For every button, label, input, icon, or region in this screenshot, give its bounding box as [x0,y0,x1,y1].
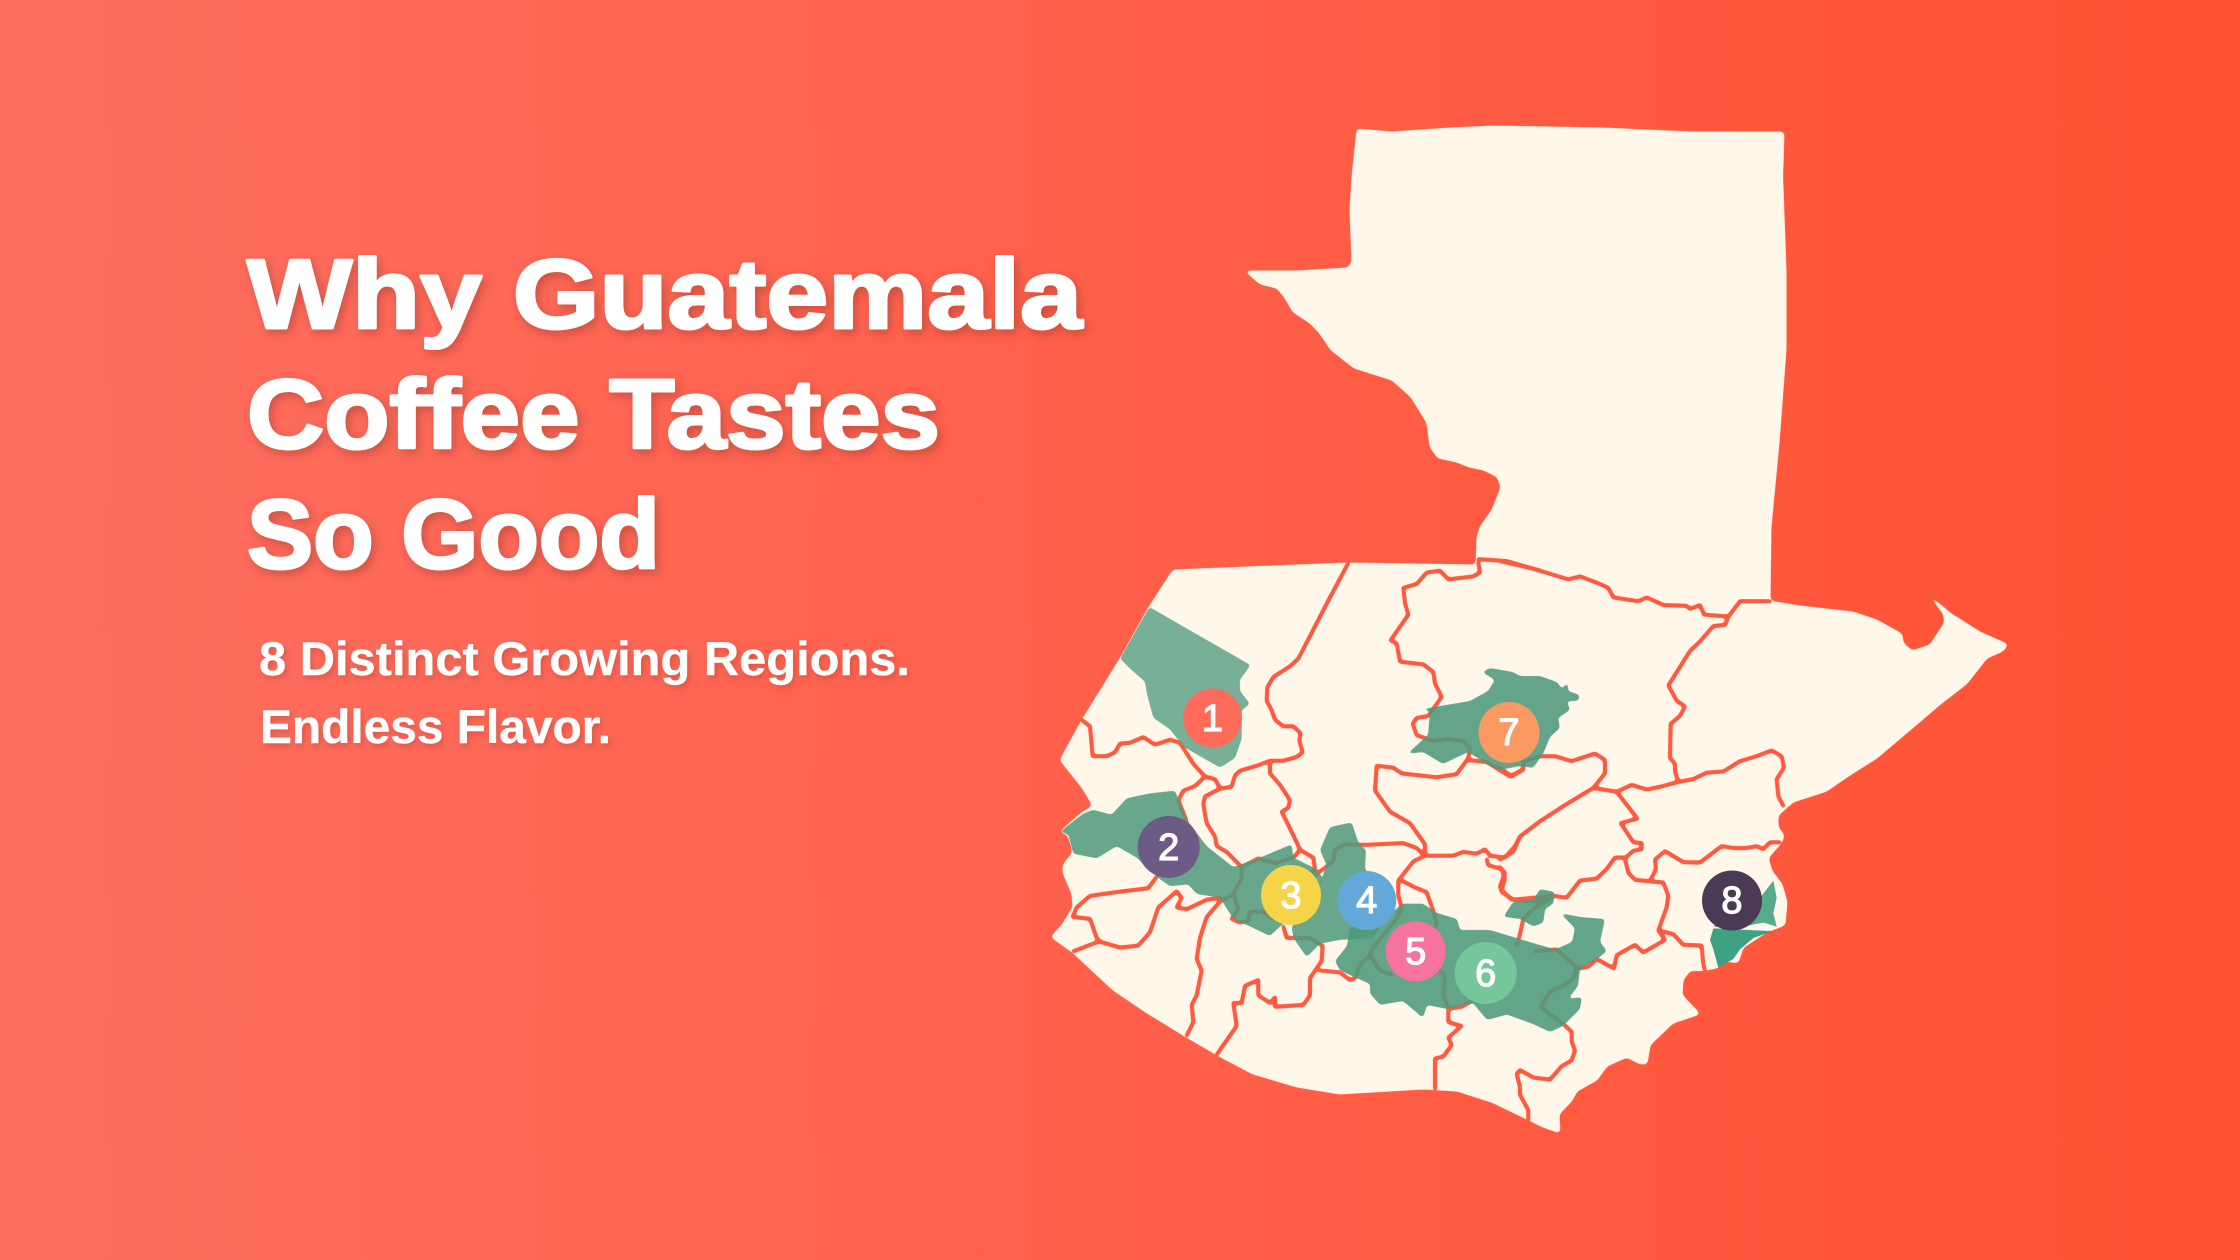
marker 5 [1386,921,1446,981]
marker 4 [1337,871,1396,930]
country landmass [1051,126,2008,1133]
boundaries: west [1073,559,1540,1089]
title [247,239,1084,589]
boundaries: east [1500,561,1784,1122]
marker 3: 3 [1280,875,1302,917]
marker 8 [1702,870,1762,930]
title: So Good [247,479,660,589]
marker 5: 5 [1405,931,1426,973]
marker 7: 7 [1498,712,1520,754]
marker 6: 6 [1475,953,1496,995]
growing region 6 small patch [1503,889,1555,926]
growing region 4 [1292,822,1395,957]
marker 3 [1261,865,1321,925]
department boundaries [1073,559,1784,1122]
growing region 7 [1407,668,1580,770]
title: Coffee Tastes [247,359,940,469]
growing region 8 [1710,881,1777,968]
growing region 2 and 3 [1060,791,1323,936]
marker 1 [1183,688,1242,748]
growing region 1 [1120,607,1251,768]
title: Why Guatemala [247,239,1084,349]
subtitle: Endless Flavor. [260,700,611,753]
map of Guatemala [1051,126,2008,1133]
marker 8: 8 [1721,880,1743,922]
marker 6 [1455,942,1517,1004]
marker 4: 4 [1356,880,1377,922]
marker 1: 1 [1202,698,1223,740]
marker 7 [1478,702,1540,763]
marker 2 [1138,816,1200,878]
marker 2: 2 [1158,827,1179,869]
subtitle [259,632,910,753]
subtitle: 8 Distinct Growing Regions. [259,632,910,685]
growing region 5 and 6 [1335,904,1607,1032]
